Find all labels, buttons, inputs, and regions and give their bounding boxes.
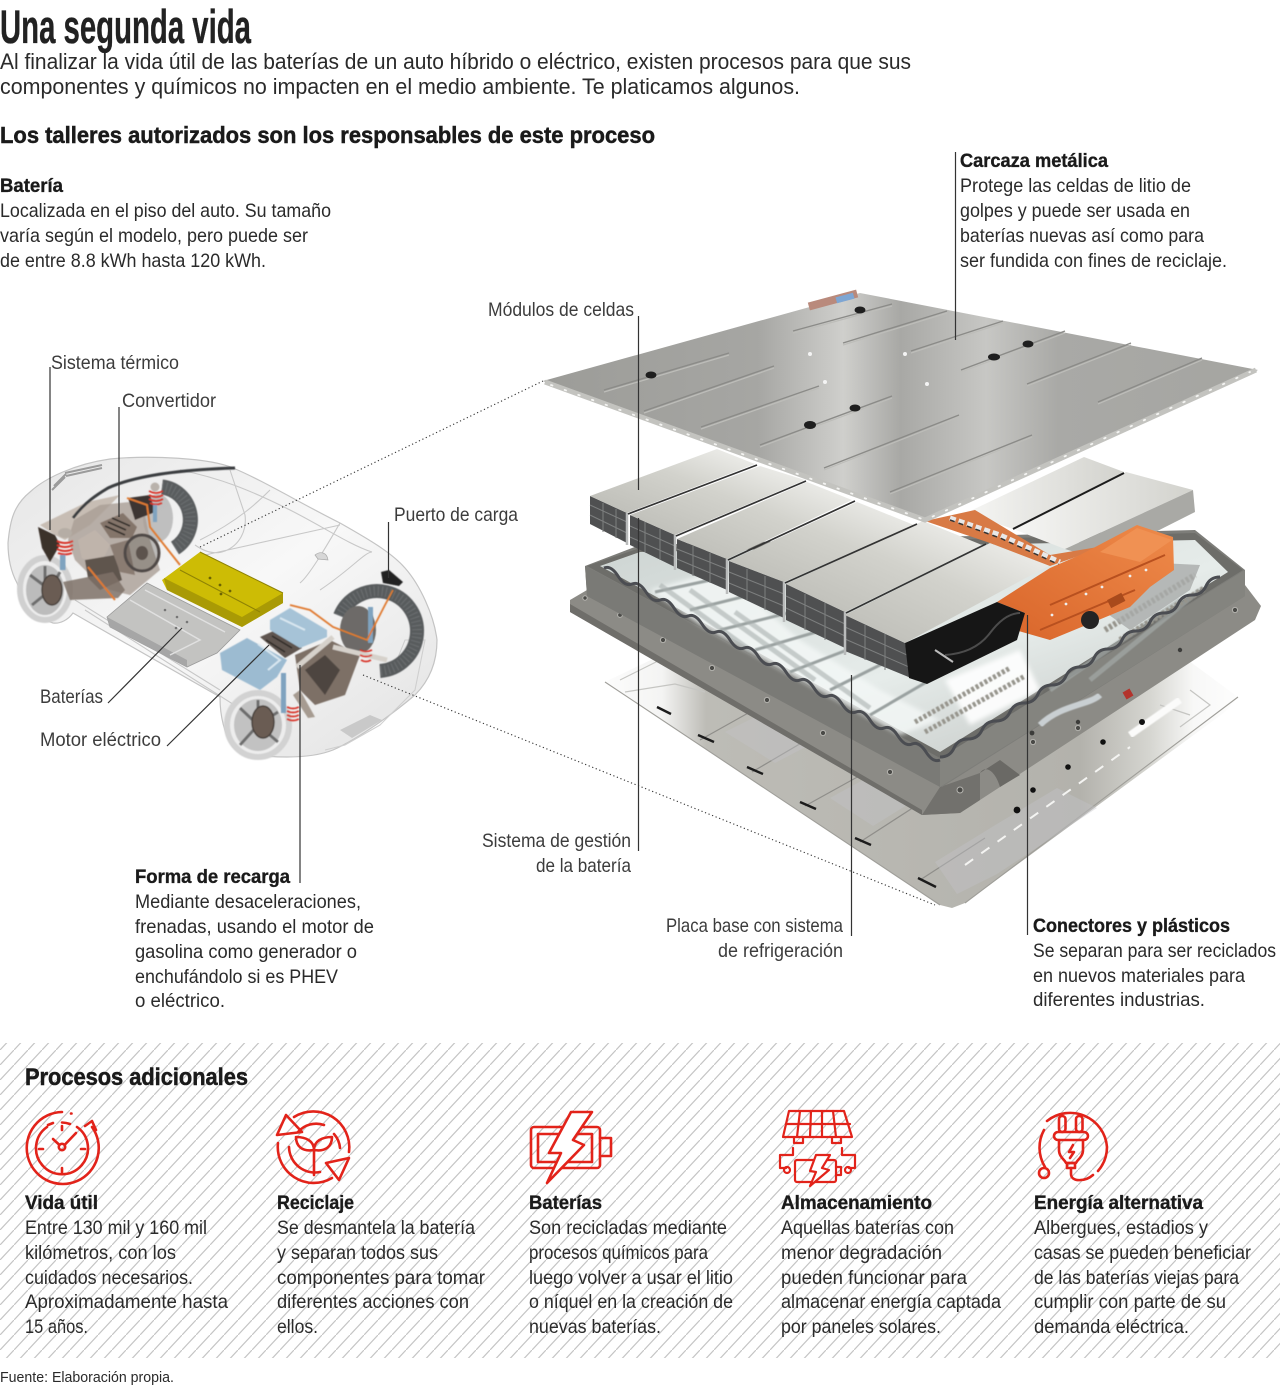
text block: batería bbox=[0, 175, 331, 272]
callout labels: Módulos de celdas bbox=[488, 299, 634, 321]
column: baterías: nuevas baterías. bbox=[529, 1316, 661, 1338]
column: almacenamiento bbox=[781, 1192, 1001, 1338]
column: almacenamiento: por paneles solares. bbox=[781, 1316, 941, 1338]
intro paragraph bbox=[0, 49, 911, 99]
source note: Fuente: Elaboración propia. bbox=[0, 1370, 174, 1386]
yellow battery bbox=[162, 552, 283, 627]
text block: forma de recarga bbox=[135, 866, 374, 1012]
module fronts bbox=[590, 496, 911, 678]
blue tanks and rear mechanics bbox=[220, 570, 403, 720]
callout labels: Sistema de gestión bbox=[482, 830, 631, 852]
column: vida útil: Aproximadamente hasta bbox=[25, 1291, 228, 1313]
column: almacenamiento: almacenar energía captada bbox=[781, 1291, 1001, 1313]
wiring strip bbox=[925, 510, 1110, 566]
column: baterías bbox=[529, 1192, 733, 1338]
text block: forma de recarga: o eléctrico. bbox=[135, 990, 225, 1012]
intro paragraph: Al finalizar la vida útil de las baterías de un auto híbrido o eléctrico, existen procesos para que sus bbox=[0, 49, 911, 74]
base plate bbox=[605, 658, 1238, 908]
column: baterías: Baterías bbox=[529, 1192, 602, 1214]
panel: procesos adicionales bbox=[0, 1043, 1280, 1358]
callout labels: Puerto de carga bbox=[394, 504, 518, 526]
text block: forma de recarga: enchufándolo si es PHEV bbox=[135, 966, 338, 988]
text block: forma de recarga: Forma de recarga bbox=[135, 866, 290, 888]
illustration: car cutaway bbox=[8, 457, 437, 757]
icon: clock bbox=[27, 1112, 99, 1184]
column: almacenamiento: Aquellas baterías con bbox=[781, 1217, 954, 1239]
column: vida útil: Entre 130 mil y 160 mil bbox=[25, 1217, 207, 1239]
title: Una segunda vida bbox=[0, 0, 252, 53]
column: almacenamiento: pueden funcionar para bbox=[781, 1267, 967, 1289]
tray flange bbox=[570, 585, 1261, 815]
column: energía alternativa bbox=[1034, 1192, 1251, 1338]
callout labels: Convertidor bbox=[122, 390, 216, 412]
metal lid bbox=[543, 290, 1258, 520]
column: baterías: luego volver a usar el litio bbox=[529, 1267, 733, 1289]
column: energía alternativa: Energía alternativa bbox=[1034, 1192, 1203, 1214]
column: energía alternativa: cumplir con parte de su bbox=[1034, 1291, 1226, 1313]
text block: conectores y plásticos bbox=[1033, 915, 1276, 1011]
text block: batería: Batería bbox=[0, 175, 63, 197]
column: baterías: o níquel en la creación de bbox=[529, 1291, 733, 1313]
orange power unit bbox=[997, 525, 1174, 640]
callout labels: Sistema térmico bbox=[51, 352, 179, 374]
column: baterías: procesos químicos para bbox=[529, 1242, 708, 1264]
text block: forma de recarga: gasolina como generador o bbox=[135, 941, 357, 963]
black control unit bbox=[905, 602, 1025, 684]
illustration: exploded battery pack bbox=[543, 290, 1261, 908]
text block: batería: varía según el modelo, pero puede ser bbox=[0, 225, 308, 247]
text block: carcaza metálica: baterías nuevas así como para bbox=[960, 225, 1204, 247]
text block: conectores y plásticos: diferentes industrias. bbox=[1033, 989, 1205, 1011]
column: almacenamiento: menor degradación bbox=[781, 1242, 942, 1264]
icon: recycling bbox=[277, 1111, 349, 1183]
module brackets bbox=[627, 513, 845, 655]
grey battery bbox=[107, 583, 240, 667]
icon: solar storage bbox=[780, 1111, 855, 1186]
column: vida útil: 15 años. bbox=[25, 1316, 88, 1338]
right rear modules bbox=[966, 457, 1195, 560]
column: vida útil: kilómetros, con los bbox=[25, 1242, 176, 1264]
cooling floor bbox=[600, 540, 1228, 761]
column: reciclaje: componentes para tomar bbox=[277, 1267, 485, 1289]
icon: plug bbox=[1039, 1113, 1107, 1180]
column: reciclaje: Reciclaje bbox=[277, 1192, 354, 1214]
text block: carcaza metálica bbox=[960, 150, 1227, 272]
column: energía alternativa: casas se pueden beneficiar bbox=[1034, 1242, 1251, 1264]
column: vida útil bbox=[25, 1192, 228, 1338]
text block: conectores y plásticos: en nuevos materiales para bbox=[1033, 965, 1245, 987]
tray frame bbox=[585, 530, 1245, 787]
column: baterías: Son recicladas mediante bbox=[529, 1217, 727, 1239]
callout labels bbox=[40, 299, 843, 962]
text block: batería: Localizada en el piso del auto. Su tamaño bbox=[0, 200, 331, 222]
leader lines and dotted connectors bbox=[50, 152, 1028, 936]
text block: carcaza metálica: Carcaza metálica bbox=[960, 150, 1108, 172]
column: reciclaje: Se desmantela la batería bbox=[277, 1217, 475, 1239]
text block: carcaza metálica: Protege las celdas de litio de bbox=[960, 175, 1191, 197]
column: vida útil: Vida útil bbox=[25, 1192, 98, 1214]
module tops bbox=[590, 449, 1050, 643]
icon: battery bbox=[531, 1112, 611, 1183]
module grid lines bbox=[590, 503, 909, 670]
panel heading: Procesos adicionales bbox=[25, 1064, 248, 1091]
callout labels: de la batería bbox=[536, 855, 631, 877]
text block: batería: de entre 8.8 kWh hasta 120 kWh. bbox=[0, 250, 266, 272]
column: reciclaje bbox=[277, 1192, 485, 1338]
text block: carcaza metálica: golpes y puede ser usada en bbox=[960, 200, 1190, 222]
callout labels: Motor eléctrico bbox=[40, 729, 161, 751]
column: reciclaje: y separan todos sus bbox=[277, 1242, 438, 1264]
text block: forma de recarga: frenadas, usando el motor de bbox=[135, 916, 374, 938]
wheels bbox=[20, 487, 417, 757]
column: vida útil: cuidados necesarios. bbox=[25, 1267, 193, 1289]
text block: carcaza metálica: ser fundida con fines de reciclaje. bbox=[960, 250, 1227, 272]
car body bbox=[8, 457, 437, 757]
callout labels: Placa base con sistema bbox=[666, 915, 843, 937]
callout labels: de refrigeración bbox=[718, 940, 843, 962]
text block: forma de recarga: Mediante desaceleraciones, bbox=[135, 891, 361, 913]
section heading: Los talleres autorizados son los responsables de este proceso bbox=[0, 122, 655, 148]
column: reciclaje: ellos. bbox=[277, 1316, 318, 1338]
callout labels: Baterías bbox=[40, 686, 103, 708]
text block: conectores y plásticos: Conectores y plásticos bbox=[1033, 915, 1230, 937]
intro paragraph: componentes y químicos no impacten en el medio ambiente. Te platicamos algunos. bbox=[0, 74, 800, 99]
column: energía alternativa: demanda eléctrica. bbox=[1034, 1316, 1189, 1338]
column: almacenamiento: Almacenamiento bbox=[781, 1192, 932, 1214]
front mechanical section bbox=[38, 468, 235, 600]
column: energía alternativa: Albergues, estadios y bbox=[1034, 1217, 1208, 1239]
column: energía alternativa: de las baterías viejas para bbox=[1034, 1267, 1239, 1289]
column: reciclaje: diferentes acciones con bbox=[277, 1291, 469, 1313]
